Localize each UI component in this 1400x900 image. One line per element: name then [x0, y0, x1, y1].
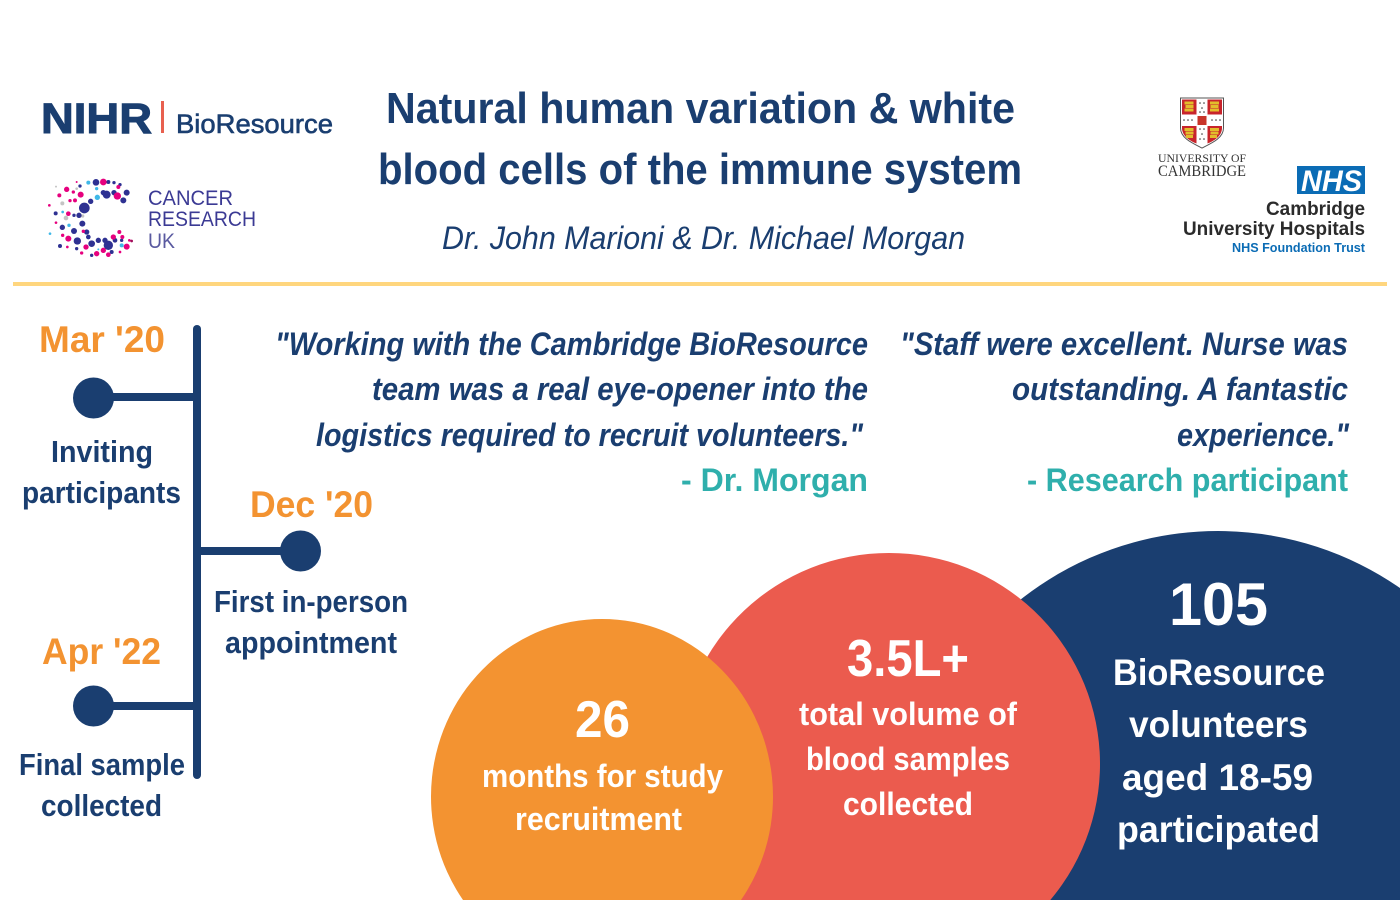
logo: University of Cambridge: UNIVERSITY OF	[1158, 151, 1246, 165]
quote: research participant: outstanding. A fantastic	[1012, 371, 1348, 407]
logo: NHS Cambridge University Hospitals	[1183, 165, 1366, 255]
logo: NIHR BioResource: NIHR	[41, 95, 152, 143]
stat circle: 26 months: recruitment	[515, 801, 682, 837]
stat circle: 3.5L+ blood: 3.5L+	[847, 630, 969, 688]
subtitle: authors: Dr. John Marioni & Dr. Michael Morgan	[442, 220, 965, 256]
logo: NHS Cambridge University Hospitals: NHS	[1301, 165, 1362, 198]
title: Natural human variation & white	[386, 84, 1015, 133]
logo: Cancer Research UK: CANCER	[148, 186, 233, 210]
stat circle: 3.5L+ blood	[678, 553, 1100, 900]
stat circle: 105 volunteers: aged 18-59	[1122, 757, 1313, 798]
title	[378, 84, 1022, 194]
milestone: Dec '20: Dec '20	[250, 484, 373, 525]
quote: research participant	[900, 326, 1350, 498]
quote: Dr. Morgan: logistics required to recruit volunteers."	[316, 417, 864, 453]
logo: Cancer Research UK: RESEARCH	[148, 207, 256, 231]
quote: Dr. Morgan	[275, 326, 868, 498]
stat circle: 105 volunteers: participated	[1117, 809, 1320, 850]
logo: NHS Cambridge University Hospitals: University Hospitals	[1183, 219, 1365, 240]
quote: Dr. Morgan: "Working with the Cambridge BioResource	[275, 326, 868, 362]
milestone: Mar '20: Inviting	[51, 434, 153, 469]
stat circle: 26 months: 26	[575, 691, 630, 749]
stat circle: 26 months	[431, 619, 773, 900]
quote: research participant: experience."	[1177, 417, 1350, 453]
milestone: Apr '22: collected	[41, 788, 162, 823]
milestone: Apr '22: Apr '22	[42, 631, 161, 672]
milestone: Dec '20: First in-person	[214, 584, 408, 619]
stat circle: 3.5L+ blood: blood samples	[806, 741, 1010, 777]
milestone: Apr '22: Final sample	[19, 747, 185, 782]
milestone: Mar '20: participants	[22, 475, 181, 510]
title: blood cells of the immune system	[378, 145, 1022, 194]
stat circle: 105 volunteers: 105	[1169, 571, 1268, 638]
milestone: Mar '20: Mar '20	[39, 319, 165, 360]
logo: NHS Cambridge University Hospitals: NHS Foundation Trust	[1232, 240, 1366, 255]
quote: research participant: - Research participant	[1027, 462, 1348, 498]
stat circle: 105 volunteers: volunteers	[1129, 704, 1308, 745]
stat circle: 3.5L+ blood: collected	[843, 786, 973, 822]
timeline	[19, 319, 408, 823]
timeline axis	[193, 325, 201, 779]
stat circle: 105 volunteers	[899, 531, 1400, 900]
logo: NIHR BioResource: BioResource	[176, 109, 333, 139]
logo: University of Cambridge	[1158, 98, 1246, 180]
milestone: Mar '20	[22, 319, 197, 510]
quote: research participant: "Staff were excellent. Nurse was	[900, 326, 1348, 362]
logo: NHS Cambridge University Hospitals: Cambridge	[1266, 199, 1365, 220]
logo: Cancer Research UK	[48, 179, 256, 257]
quote: Dr. Morgan: team was a real eye-opener into the	[372, 371, 868, 407]
stat circle: 105 volunteers: BioResource	[1113, 652, 1325, 693]
logo: NIHR BioResource	[41, 95, 333, 143]
milestone: Dec '20	[197, 484, 408, 660]
logo: University of Cambridge: CAMBRIDGE	[1158, 163, 1246, 180]
stat circle: 26 months: months for study	[482, 758, 723, 794]
logo: Cancer Research UK: UK	[148, 229, 176, 253]
milestone: Apr '22	[19, 631, 197, 823]
quote: Dr. Morgan: - Dr. Morgan	[681, 462, 868, 498]
stat circle: 3.5L+ blood: total volume of	[799, 696, 1017, 732]
milestone: Dec '20: appointment	[225, 625, 397, 660]
